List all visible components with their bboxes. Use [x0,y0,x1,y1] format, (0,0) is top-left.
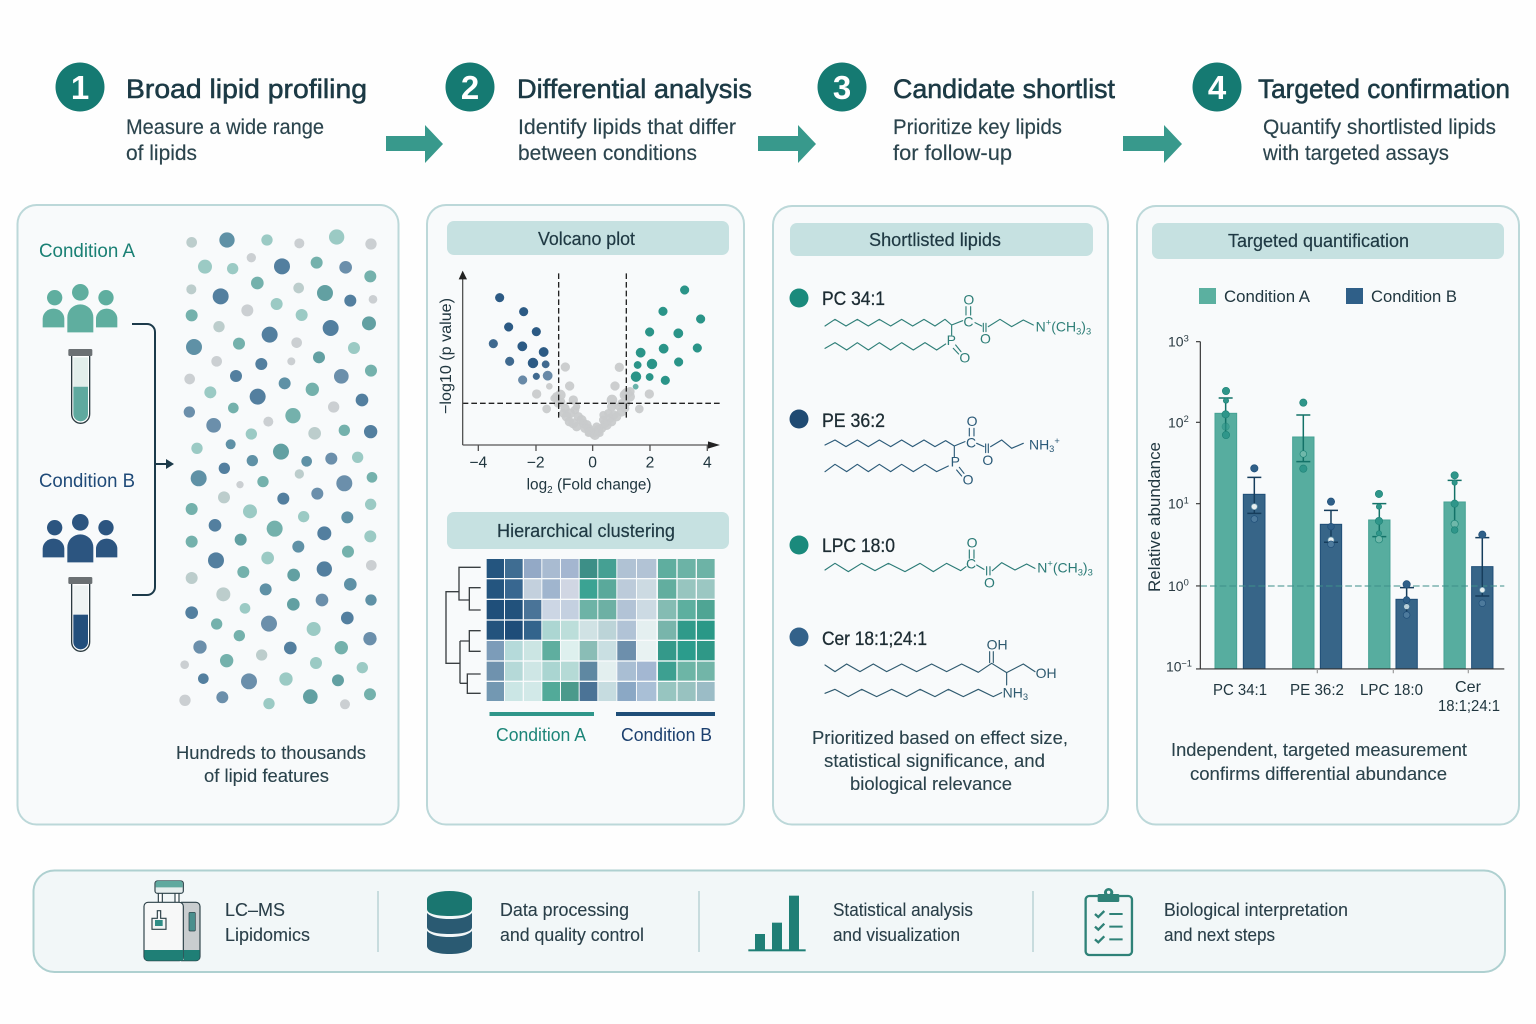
pill heading: Volcano plot: Volcano plot [538,229,635,249]
structure: LPC: 3 [1078,567,1083,577]
structure: PC: 3 [1086,326,1091,336]
structure: PE: C [966,434,976,450]
number badge 4: 4 [1208,69,1227,106]
axis tick labels: −4 [469,454,488,471]
structure: PE [825,413,1060,487]
y tick labels: 2 [1184,414,1189,424]
number badge 4 [1192,62,1242,112]
subtitle: of lipids [126,142,197,165]
axis tick labels: 2 [646,454,654,471]
y tick labels: 10 [1168,334,1184,350]
x axis label: log [527,476,547,493]
axis tick labels: −2 [527,454,545,471]
bar chart [1166,333,1504,675]
axis tick labels: 4 [703,454,712,471]
structure: PC: P [947,332,956,348]
axis tick labels: 0 [588,454,597,471]
y tick labels: 10 [1168,414,1184,430]
x axis label: 2 [547,485,553,496]
number badge 1 [56,62,104,112]
y tick labels: 1 [1184,495,1189,505]
lipid entry: LPC 18:0 [790,534,1093,591]
axes [459,271,720,451]
lipid feature dots, upper field [184,229,377,491]
structure: PC: 3 [1076,326,1081,336]
reference line at 10^0 [1200,584,1504,587]
step 4 header [1192,62,1510,165]
up-regulated points [631,286,705,389]
y axis label: −log10 (p value) [438,298,455,414]
icon: clipboard checklist [1086,888,1132,955]
y tick labels: 0 [1184,578,1189,588]
icon: database [427,891,472,954]
heatmap legend: Condition A [490,712,594,745]
lipid entry: PE 36:2 [790,410,1060,487]
structure: PC: + [1046,318,1051,328]
structure: LPC: N [1037,560,1047,576]
pill heading: Volcano plot [447,221,729,255]
subtitle: for follow-up [893,142,1012,165]
text: statistical analysis [833,899,973,945]
y tick labels: 10 [1168,578,1184,594]
dendrogram [446,567,481,693]
structure: PE: O [967,413,978,429]
heading: Broad lipid profiling: Broad lipid profiling [126,74,367,104]
x tick labels: PC 34:1 [1213,682,1267,699]
text: data processing [500,899,644,945]
text: biological interpretation: and next steps [1164,924,1275,945]
subtitle [1262,116,1496,165]
icon: test tube A [68,349,92,423]
structure: Cer: NH [1003,684,1023,700]
structure: PE: O [963,471,974,487]
subtitle: Prioritize key lipids [893,116,1062,139]
structure: LPC [825,534,1093,591]
caption: confirmation [1171,739,1467,784]
arrow: step 1 to 2 [386,125,443,163]
caption: confirmation: confirms differential abundance [1190,763,1447,784]
heading: Candidate shortlist: Candidate shortlist [893,74,1116,104]
pill heading: Hierarchical clustering [447,512,729,549]
structure: PC: C [963,313,973,329]
lipid entry: PC 34:1 [790,288,1091,366]
caption: prioritization: Prioritized based on effect size, [812,727,1068,748]
pill heading: Shortlisted lipids: Shortlisted lipids [869,230,1001,250]
bottom workflow band [34,870,1505,972]
panel: differential analysis [427,205,744,824]
arrow: step 2 to 3 [758,125,816,163]
step 2 header [446,62,752,165]
text: LC-MS Lipidomics: Lipidomics [225,924,310,945]
text: data processing: and quality control [500,924,644,945]
y tick labels: −1 [1181,658,1192,668]
label: Condition A: Condition A [39,241,135,262]
y tick labels: 10 [1166,659,1182,675]
icon: people group A [43,284,117,332]
text: data processing: Data processing [500,899,629,920]
subtitle [518,116,736,165]
subtitle: between conditions [518,142,697,165]
caption: confirmation: Independent, targeted measurement [1171,739,1467,760]
number badge 3: 3 [833,69,851,106]
structure: PE: O [982,452,993,468]
structure: PC: O [959,350,970,366]
caption: prioritization: biological relevance [850,773,1012,794]
structure: Cer: OH [1036,665,1057,681]
pill heading: Targeted quantification: Targeted quantification [1228,231,1409,251]
structure: PC [825,292,1091,366]
number badge 2: 2 [461,69,479,106]
structure: PE: NH [1029,436,1049,452]
structure: LPC: (CH [1053,560,1078,576]
subtitle: Identify lipids that differ [518,116,736,139]
lipid entry: PE 36:2: PE 36:2 [822,411,885,432]
heatmap legend: Condition B [616,712,715,745]
axes [1196,342,1504,673]
structure: LPC: O [984,575,995,591]
caption: prioritization [812,727,1068,794]
icon: LC-MS instrument [144,881,200,961]
non-significant points [532,363,654,440]
error bars [1219,398,1489,613]
heatmap [487,559,715,701]
structure: Cer: OH [987,636,1008,652]
heading: Targeted confirmation: Targeted confirmation [1258,74,1510,104]
threshold lines [463,273,722,420]
structure: Cer [825,636,1057,702]
caption: prioritization: statistical significance, and [824,750,1045,771]
text: statistical analysis: and visualization [833,924,960,945]
structure: PE: + [1054,436,1060,446]
heatmap legend: Condition A: Condition A [496,725,586,745]
structure: Cer: 3 [1023,692,1028,702]
pill heading: Hierarchical clustering: Hierarchical clustering [497,521,675,541]
heatmap legend: Condition B: Condition B [621,725,712,745]
legend: Condition A: Condition A [1224,287,1311,306]
down-regulated points [489,293,552,384]
pill heading: Shortlisted lipids [790,223,1093,256]
text: biological interpretation [1164,899,1348,945]
x axis label: (Fold change) [553,476,652,493]
y tick labels: 10 [1168,496,1184,512]
number badge 2 [446,62,494,112]
structure: LPC: ) [1083,560,1088,576]
structure: LPC: 3 [1088,567,1093,577]
x tick labels: 18:1;24:1 [1438,698,1500,715]
icon: people group B [43,514,117,562]
pill heading: Targeted quantification [1152,223,1504,259]
axis tick labels [469,454,712,471]
text: LC-MS Lipidomics [225,899,310,945]
panel: targeted confirmation [1137,206,1519,824]
structure: PC: O [980,330,991,346]
x tick labels: LPC 18:0 [1360,682,1423,699]
subtitle [893,116,1062,165]
lipid entry: PC 34:1: PC 34:1 [822,289,885,310]
subtitle: Quantify shortlisted lipids [1263,116,1496,139]
y axis label: Relative abundance [1145,442,1164,592]
y tick labels: 3 [1184,333,1189,343]
subtitle [126,116,324,165]
structure: PC: ) [1081,319,1086,335]
bracket with arrow [132,324,174,595]
step 1 header [56,62,367,165]
structure: PC: O [963,292,974,308]
lipid entry: LPC 18:0: LPC 18:0 [822,536,895,557]
caption: lipid features: of lipid features [204,765,329,786]
label: Condition B: Condition B [39,471,135,492]
legend: Condition B: Condition B [1371,287,1457,306]
structure: LPC: C [966,556,976,572]
structure: LPC: + [1047,559,1053,569]
lipid entry: Cer 18:1;24:1 [790,628,1057,702]
volcano plot [459,271,722,496]
text: statistical analysis: Statistical analysis [833,899,973,920]
lipid feature dots, lower field [179,481,377,709]
x tick labels: Cer [1455,679,1482,696]
lipid entry: Cer 18:1;24:1: Cer 18:1;24:1 [822,629,927,650]
structure: LPC: O [967,534,978,550]
y tick labels [1166,333,1192,675]
structure: PE: 3 [1049,444,1054,454]
structure: PC: N [1036,319,1046,335]
arrow: step 3 to 4 [1123,125,1182,163]
x tick labels [1213,679,1500,715]
text: LC-MS Lipidomics: LC–MS [225,899,285,920]
caption: lipid features: Hundreds to thousands [176,742,366,763]
x tick labels: PE 36:2 [1290,682,1344,699]
number badge 1: 1 [71,69,89,106]
caption: lipid features [176,742,366,786]
icon: test tube B [68,577,92,651]
panel: broad lipid profiling [18,205,398,824]
heading: Differential analysis: Differential analysis [517,74,752,104]
structure: PE: P [951,454,960,470]
replicate points [1222,387,1486,618]
number badge 3 [818,62,866,112]
subtitle: with targeted assays [1262,142,1449,165]
text: biological interpretation: Biological interpretation [1164,899,1348,920]
bars [1215,413,1493,669]
icon: bar chart [748,896,806,951]
panel: candidate shortlist [773,206,1108,824]
subtitle: Measure a wide range [126,116,324,139]
structure: PC: (CH [1051,319,1076,335]
step 3 header [818,62,1116,165]
